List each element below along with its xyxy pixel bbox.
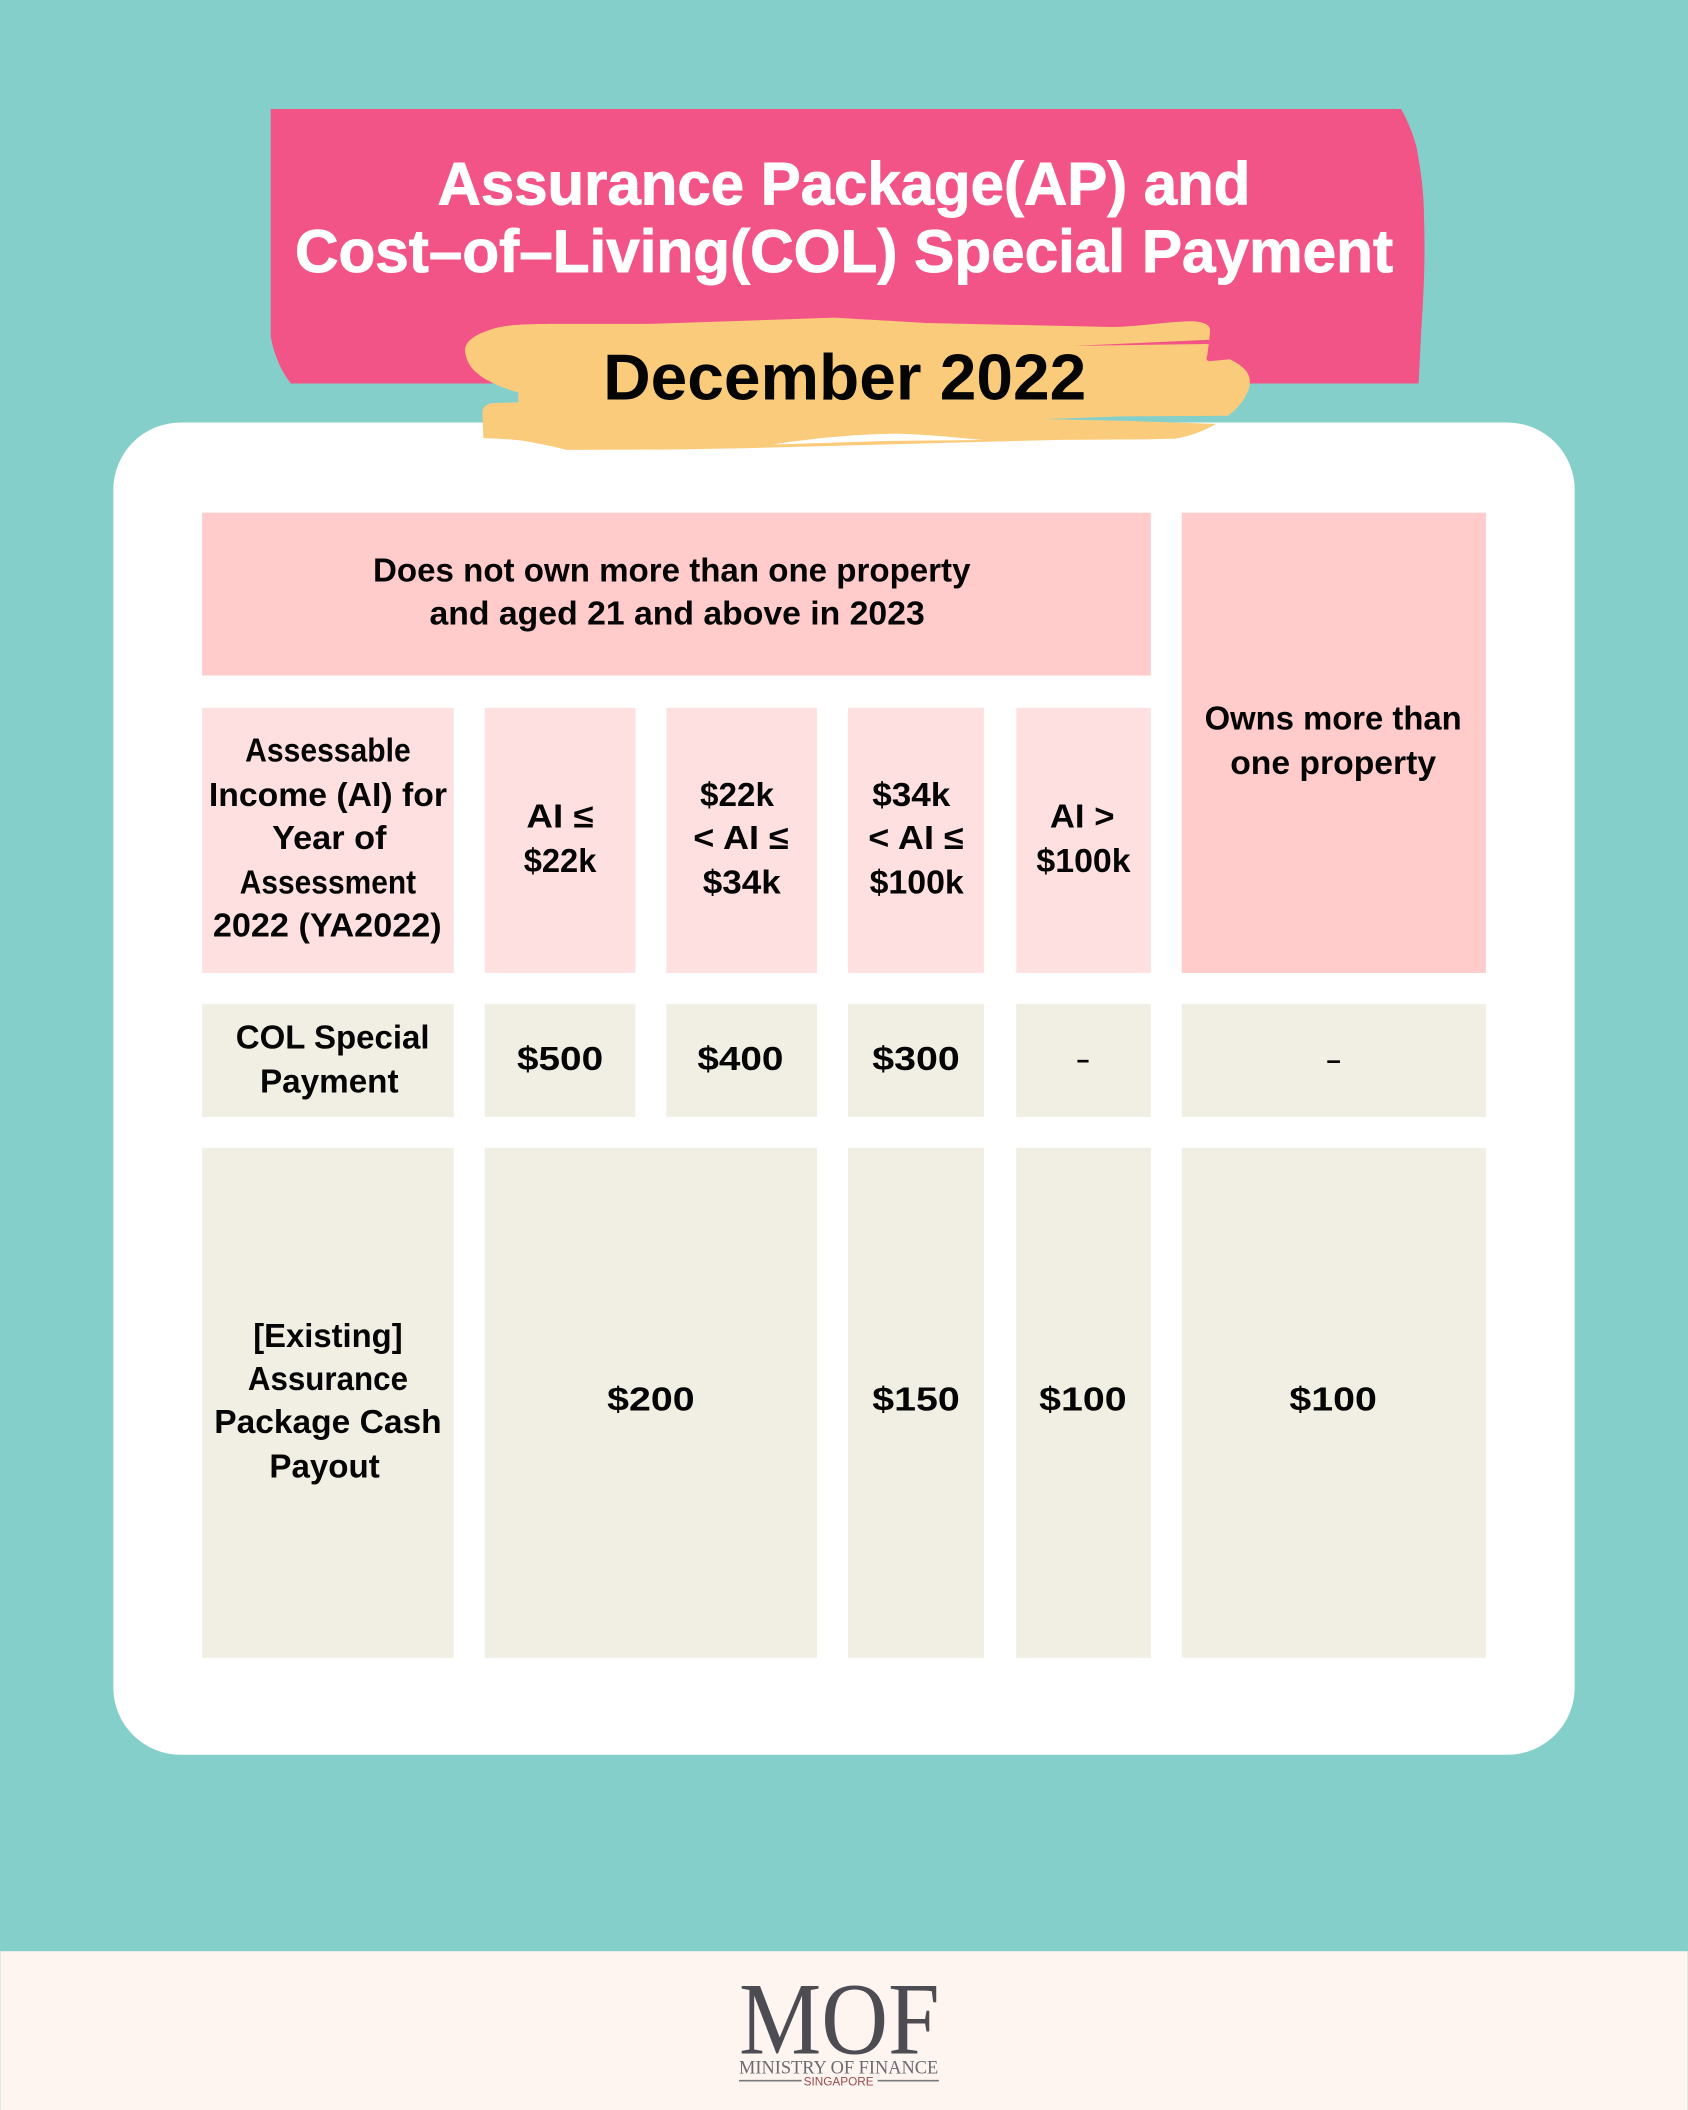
row label: assessable income: Income (AI) for: [209, 777, 447, 814]
MOF logo: SINGAPORE: [804, 2074, 874, 2088]
row label: assessable income: 2022 (YA2022): [213, 908, 442, 945]
title text: Cost–of–Living(COL) Special Payment: [295, 217, 1393, 285]
income band: 34k to 100k: $34k: [872, 777, 951, 814]
date badge: yellow brush stroke: [465, 318, 1250, 450]
MOF logo: MOF: [739, 1963, 940, 2076]
title banner: [271, 109, 1425, 384]
COL value: 400: $400: [697, 1041, 783, 1078]
payout value: 100: [1016, 1148, 1151, 1658]
header: does not own more than one property: Does not own more than one property: [373, 552, 971, 589]
COL value: 400: [666, 1004, 817, 1117]
income band: above 100k: AI >: [1050, 799, 1114, 836]
payout value: 100 for multiple properties: $100: [1289, 1381, 1377, 1418]
header: does not own more than one property: [202, 513, 1151, 676]
row label: COL special payment: [202, 1004, 454, 1117]
row label: assurance package cash payout: Payout: [269, 1449, 380, 1486]
row label: assessable income: [202, 708, 454, 973]
payout value: 100 for multiple properties: [1182, 1148, 1486, 1658]
COL value: 500: $500: [517, 1041, 603, 1078]
row label: assessable income: Assessment: [240, 865, 416, 902]
date text: December 2022: [603, 342, 1086, 414]
title text: Assurance Package(AP) and: [438, 150, 1250, 218]
row label: COL special payment: COL Special: [236, 1019, 430, 1056]
table: [202, 513, 1486, 1658]
income band: up to 22k: [485, 708, 635, 973]
row label: assurance package cash payout: [Existing]: [253, 1318, 403, 1355]
income band: up to 22k: $22k: [524, 843, 597, 880]
income band: 22k to 34k: $34k: [703, 865, 781, 902]
row label: assurance package cash payout: Assurance: [248, 1361, 408, 1398]
payout value: 150: $150: [872, 1381, 960, 1418]
white table panel: [113, 423, 1575, 1755]
row label: assurance package cash payout: [202, 1148, 454, 1658]
header: owns more than one property: Owns more than: [1205, 700, 1462, 737]
income band: 22k to 34k: < AI ≤: [693, 820, 789, 857]
row label: assessable income: Assessable: [245, 733, 411, 770]
income band: 34k to 100k: $100k: [870, 865, 964, 902]
COL value: 300: [848, 1004, 984, 1117]
income band: 34k to 100k: < AI ≤: [868, 820, 964, 857]
header: owns more than one property: [1182, 513, 1486, 973]
income band: 22k to 34k: [666, 708, 817, 973]
footer band: [0, 1951, 1688, 2110]
income band: 22k to 34k: $22k: [700, 777, 774, 814]
payout value: 200: $200: [607, 1381, 695, 1418]
income band: up to 22k: AI ≤: [526, 799, 594, 836]
title text: [295, 150, 1393, 285]
payout value: 200: [485, 1148, 817, 1658]
row label: assurance package cash payout: Package Cash: [214, 1404, 442, 1441]
COL value: 300: $300: [872, 1041, 960, 1078]
COL value: none for multiple properties: [1182, 1004, 1486, 1117]
income band: 34k to 100k: [848, 708, 984, 973]
header: does not own more than one property: and aged 21 and above in 2023: [430, 595, 925, 632]
row label: COL special payment: Payment: [260, 1064, 399, 1101]
payout value: 150: [848, 1148, 984, 1658]
payout value: 100: $100: [1039, 1381, 1127, 1418]
COL value: none for multiple properties: –: [1327, 1045, 1341, 1075]
COL value: none above 100k: [1016, 1004, 1151, 1117]
COL value: 500: [485, 1004, 635, 1117]
header: owns more than one property: one property: [1230, 745, 1436, 782]
COL value: none above 100k: –: [1077, 1044, 1089, 1074]
MOF logo: MINISTRY OF FINANCE: [739, 2058, 938, 2079]
income band: above 100k: [1016, 708, 1151, 973]
row label: assessable income: Year of: [272, 820, 387, 857]
income band: above 100k: $100k: [1036, 843, 1131, 880]
